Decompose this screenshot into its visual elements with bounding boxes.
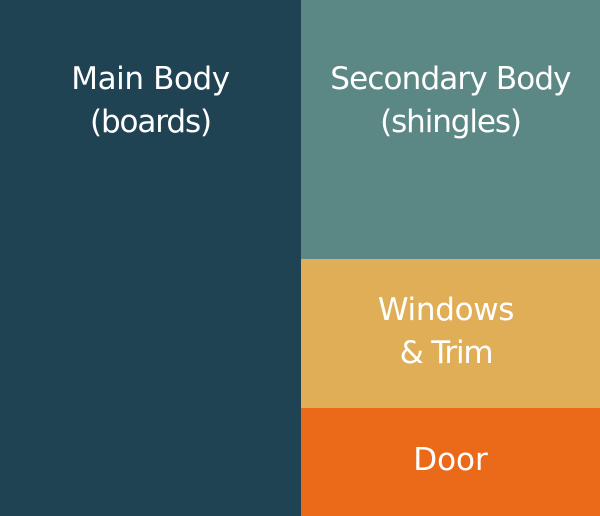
label: main body boards <box>71 61 230 140</box>
label: door: Door <box>413 442 488 478</box>
label: main body boards: Main Body <box>71 61 230 97</box>
label: windows and trim <box>378 292 514 371</box>
label: windows and trim: Windows <box>378 292 514 328</box>
label: windows and trim: & Trim <box>400 335 492 371</box>
label: secondary body shingles: (shingles) <box>380 104 521 140</box>
label: secondary body shingles: Secondary Body <box>330 61 571 97</box>
panel: windows and trim <box>301 259 600 408</box>
panel: secondary body <box>301 0 600 259</box>
panel: main body <box>0 0 301 516</box>
panel: door <box>301 408 600 516</box>
label: main body boards: (boards) <box>90 104 211 140</box>
label: secondary body shingles <box>330 61 571 140</box>
